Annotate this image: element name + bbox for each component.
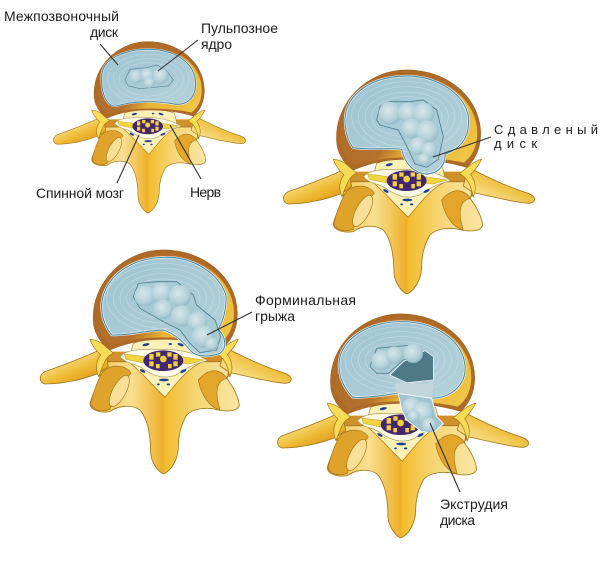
leader line: nucleus — [158, 40, 198, 71]
label: intervertebral disc: Межпозвоночный — [4, 8, 119, 24]
leader line: compressed disc — [433, 137, 491, 157]
label: intervertebral disc: диск — [90, 24, 119, 40]
vertebra 4: disc extrusion — [278, 314, 529, 538]
herniated disc and nucleus — [102, 257, 226, 356]
label: nucleus pulposus: ядро — [201, 36, 232, 52]
compressed disc bulge and nucleus — [345, 76, 469, 174]
label: disc extrusion: диска — [440, 512, 475, 528]
leader line: nerve — [170, 125, 201, 179]
label: foraminal hernia: грыжа — [255, 308, 295, 324]
label: foraminal hernia: Форминальная — [255, 292, 356, 308]
leader line: spinal cord — [117, 135, 139, 183]
leader line: hernia — [207, 312, 252, 335]
vertebra 2: compressed disc — [284, 70, 535, 294]
extruded disc and nucleus — [339, 322, 465, 432]
bone of vertebra 2 — [284, 70, 535, 294]
label: disc extrusion: Экструдия — [440, 496, 508, 512]
disc with nucleus pulposus — [102, 49, 196, 106]
leader line: disc — [100, 44, 118, 65]
bone of vertebra 1 — [54, 42, 246, 213]
vertebra 1: normal disc — [54, 42, 246, 213]
label: spinal cord: Спинной мозг — [36, 185, 124, 201]
bone of vertebra 3 — [40, 250, 291, 474]
bone of vertebra 4 — [278, 314, 529, 538]
label: nerve: Нерв — [190, 184, 221, 200]
leader line: extrusion — [430, 423, 460, 492]
label: compressed disc: Сдавленый — [494, 122, 598, 137]
vertebra 3: foraminal hernia — [40, 250, 291, 474]
label: compressed disc: диск — [494, 136, 537, 151]
label: nucleus pulposus: Пульпозное — [201, 20, 278, 36]
